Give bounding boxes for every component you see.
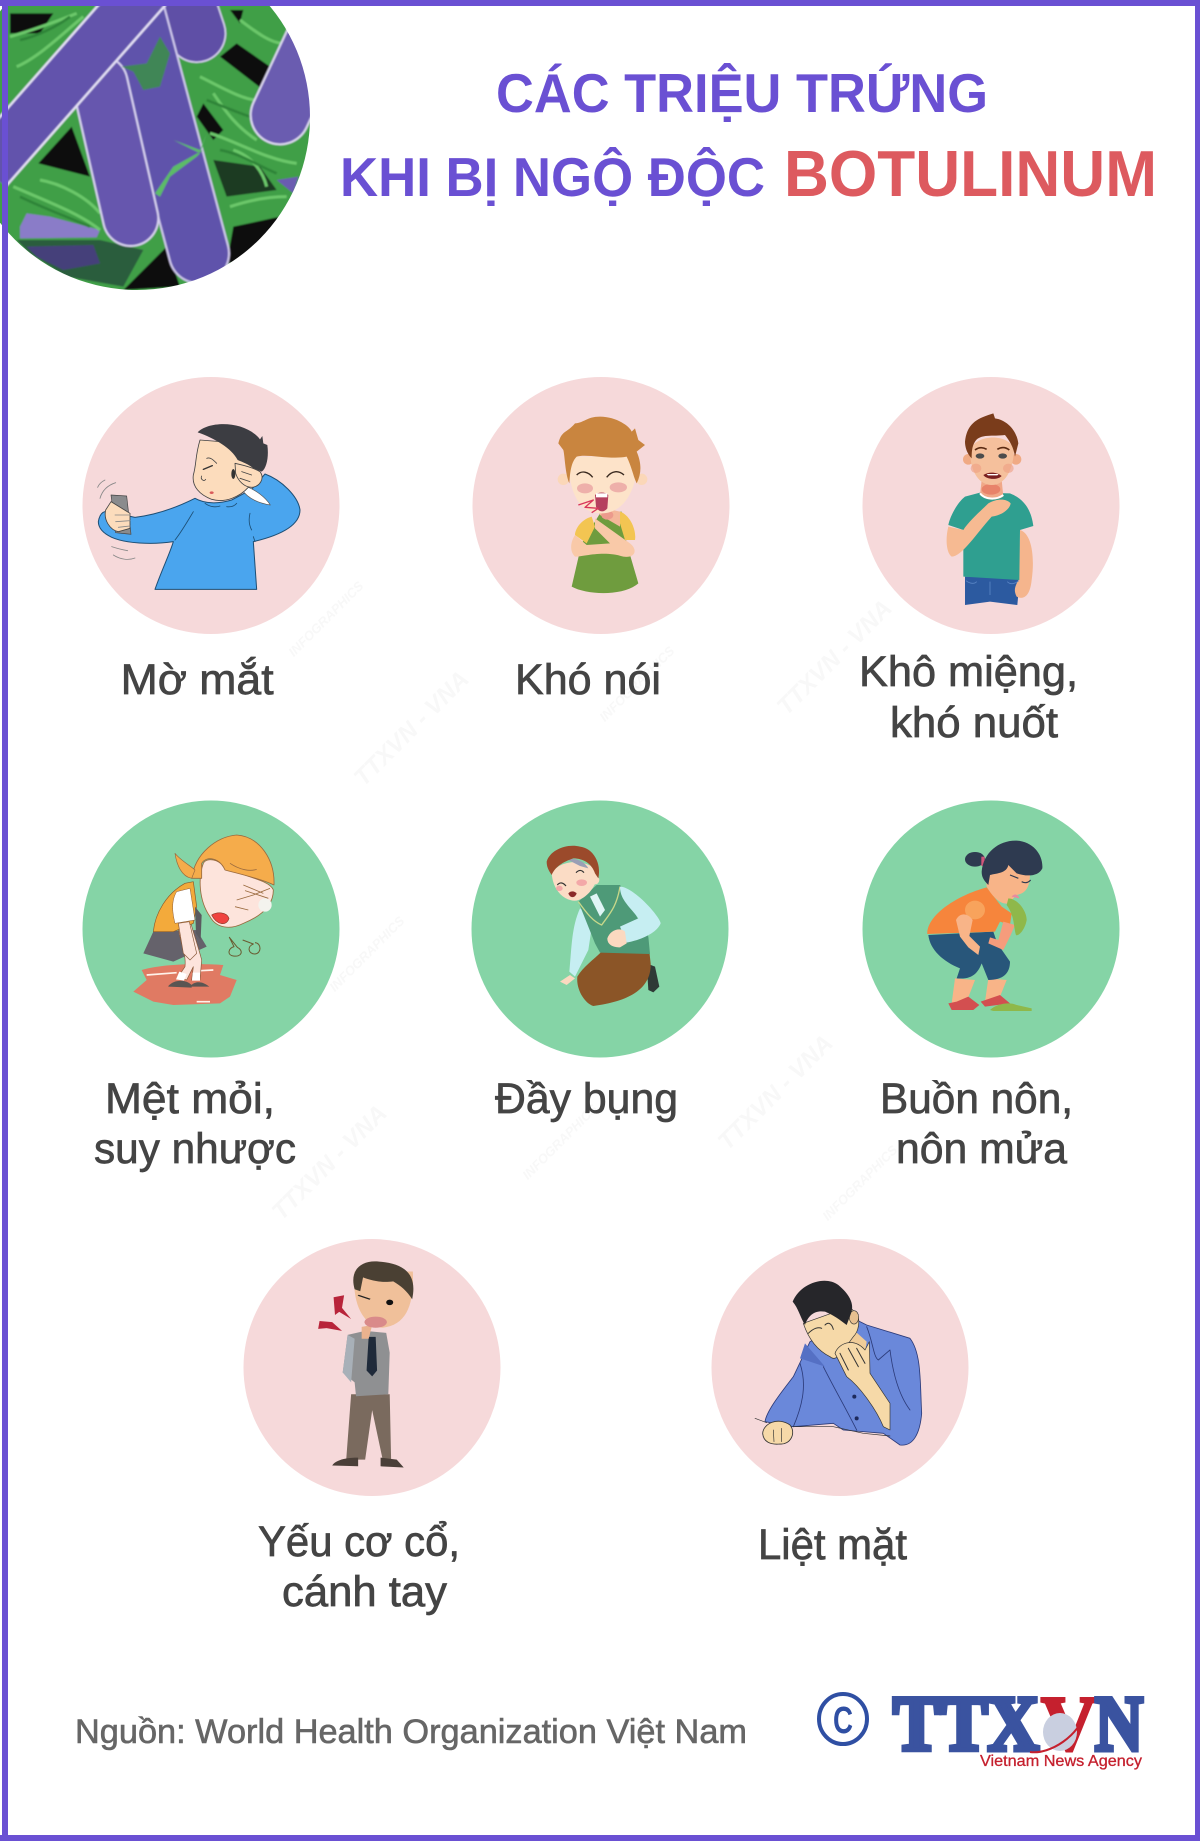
watermarks: TTXVN - VNA <box>349 666 475 792</box>
watermarks: TTXVN - VNA <box>267 1100 393 1226</box>
label line 1: Yếu cơ cổ, <box>258 1518 460 1566</box>
circle background <box>862 800 1120 1058</box>
watermarks: TTXVN - VNA <box>772 595 898 721</box>
label line 2: suy nhược <box>94 1125 296 1173</box>
rod diagonal <box>0 0 147 170</box>
watermarks: INFOGRAPHICS <box>285 578 367 659</box>
watermarks: INFOGRAPHICS <box>596 643 678 724</box>
icon: boy holding throat <box>947 413 1033 605</box>
label line 1: Buồn nôn, <box>880 1075 1073 1123</box>
label line 1: Khô miệng, <box>859 648 1078 696</box>
circle background <box>82 800 340 1058</box>
panel: Khô miệng, khó nuốt <box>859 377 1120 747</box>
label: Khó nói <box>515 656 661 704</box>
circle background <box>472 800 728 1058</box>
circle background <box>712 1239 968 1496</box>
label: Đầy bụng <box>495 1075 678 1123</box>
icon: bacteria photo circle <box>0 6 310 290</box>
panel: Liệt mặt <box>712 1239 968 1569</box>
watermarks: INFOGRAPHICS <box>326 913 408 994</box>
panel: Buồn nôn, nôn mửa <box>862 800 1120 1173</box>
label <box>258 1518 460 1616</box>
rod center long <box>134 10 199 253</box>
label line 1: Mệt mỏi, <box>105 1075 275 1123</box>
label: Mờ mắt <box>121 656 274 704</box>
panel: Mờ mắt <box>82 377 340 704</box>
icon: boy with sore mouth <box>558 417 647 593</box>
panel: Khó nói <box>472 377 730 704</box>
icon: man squinting at phone <box>98 424 300 589</box>
circle background <box>862 377 1120 634</box>
label: Liệt mặt <box>758 1521 907 1569</box>
panel: Mệt mỏi, suy nhược <box>82 800 340 1173</box>
title highlight: BOTULINUM <box>784 137 1157 210</box>
watermarks: INFOGRAPHICS <box>819 1142 901 1223</box>
watermarks: TTXVN - VNA <box>713 1030 839 1156</box>
label line 2: nôn mửa <box>896 1125 1067 1173</box>
rod short <box>100 83 131 218</box>
title line 2: KHI BỊ NGỘ ĐỘC <box>340 146 765 208</box>
panel: Đầy bụng <box>472 800 728 1123</box>
circle background <box>472 377 730 634</box>
logo tagline: Vietnam News Agency <box>980 1753 1142 1770</box>
label line 2: khó nuốt <box>890 699 1058 747</box>
rod right <box>280 37 317 115</box>
rod top <box>187 3 197 33</box>
source text: Nguồn: World Health Organization Việt Nam <box>75 1713 747 1751</box>
circle background <box>82 377 340 634</box>
icon: man holding face <box>755 1281 922 1445</box>
panel: Yếu cơ cổ, cánh tay <box>244 1239 500 1616</box>
icon: copyright: C <box>833 1700 853 1742</box>
icon: copyright <box>819 1694 867 1744</box>
title line 1: CÁC TRIỆU TRỨNG <box>496 62 988 124</box>
label <box>880 1075 1073 1173</box>
label <box>94 1075 296 1173</box>
logo letters TTX: TTX <box>893 1680 1039 1767</box>
watermarks: INFOGRAPHICS <box>519 1101 601 1182</box>
icon: tired girl bending <box>133 835 274 1005</box>
circle background <box>244 1239 500 1496</box>
icon: kneeling boy holding stomach <box>547 846 661 1006</box>
title <box>340 62 1157 210</box>
watermarks <box>267 578 901 1226</box>
logo letter N: N <box>1095 1680 1143 1767</box>
logo letter V: V <box>1041 1680 1097 1767</box>
logo: TTXVN <box>893 1680 1143 1770</box>
label <box>859 648 1078 747</box>
icon: man with neck pain <box>318 1261 413 1468</box>
logo globe <box>1030 1712 1085 1752</box>
icon: woman vomiting <box>927 841 1042 1011</box>
label line 2: cánh tay <box>282 1568 447 1616</box>
